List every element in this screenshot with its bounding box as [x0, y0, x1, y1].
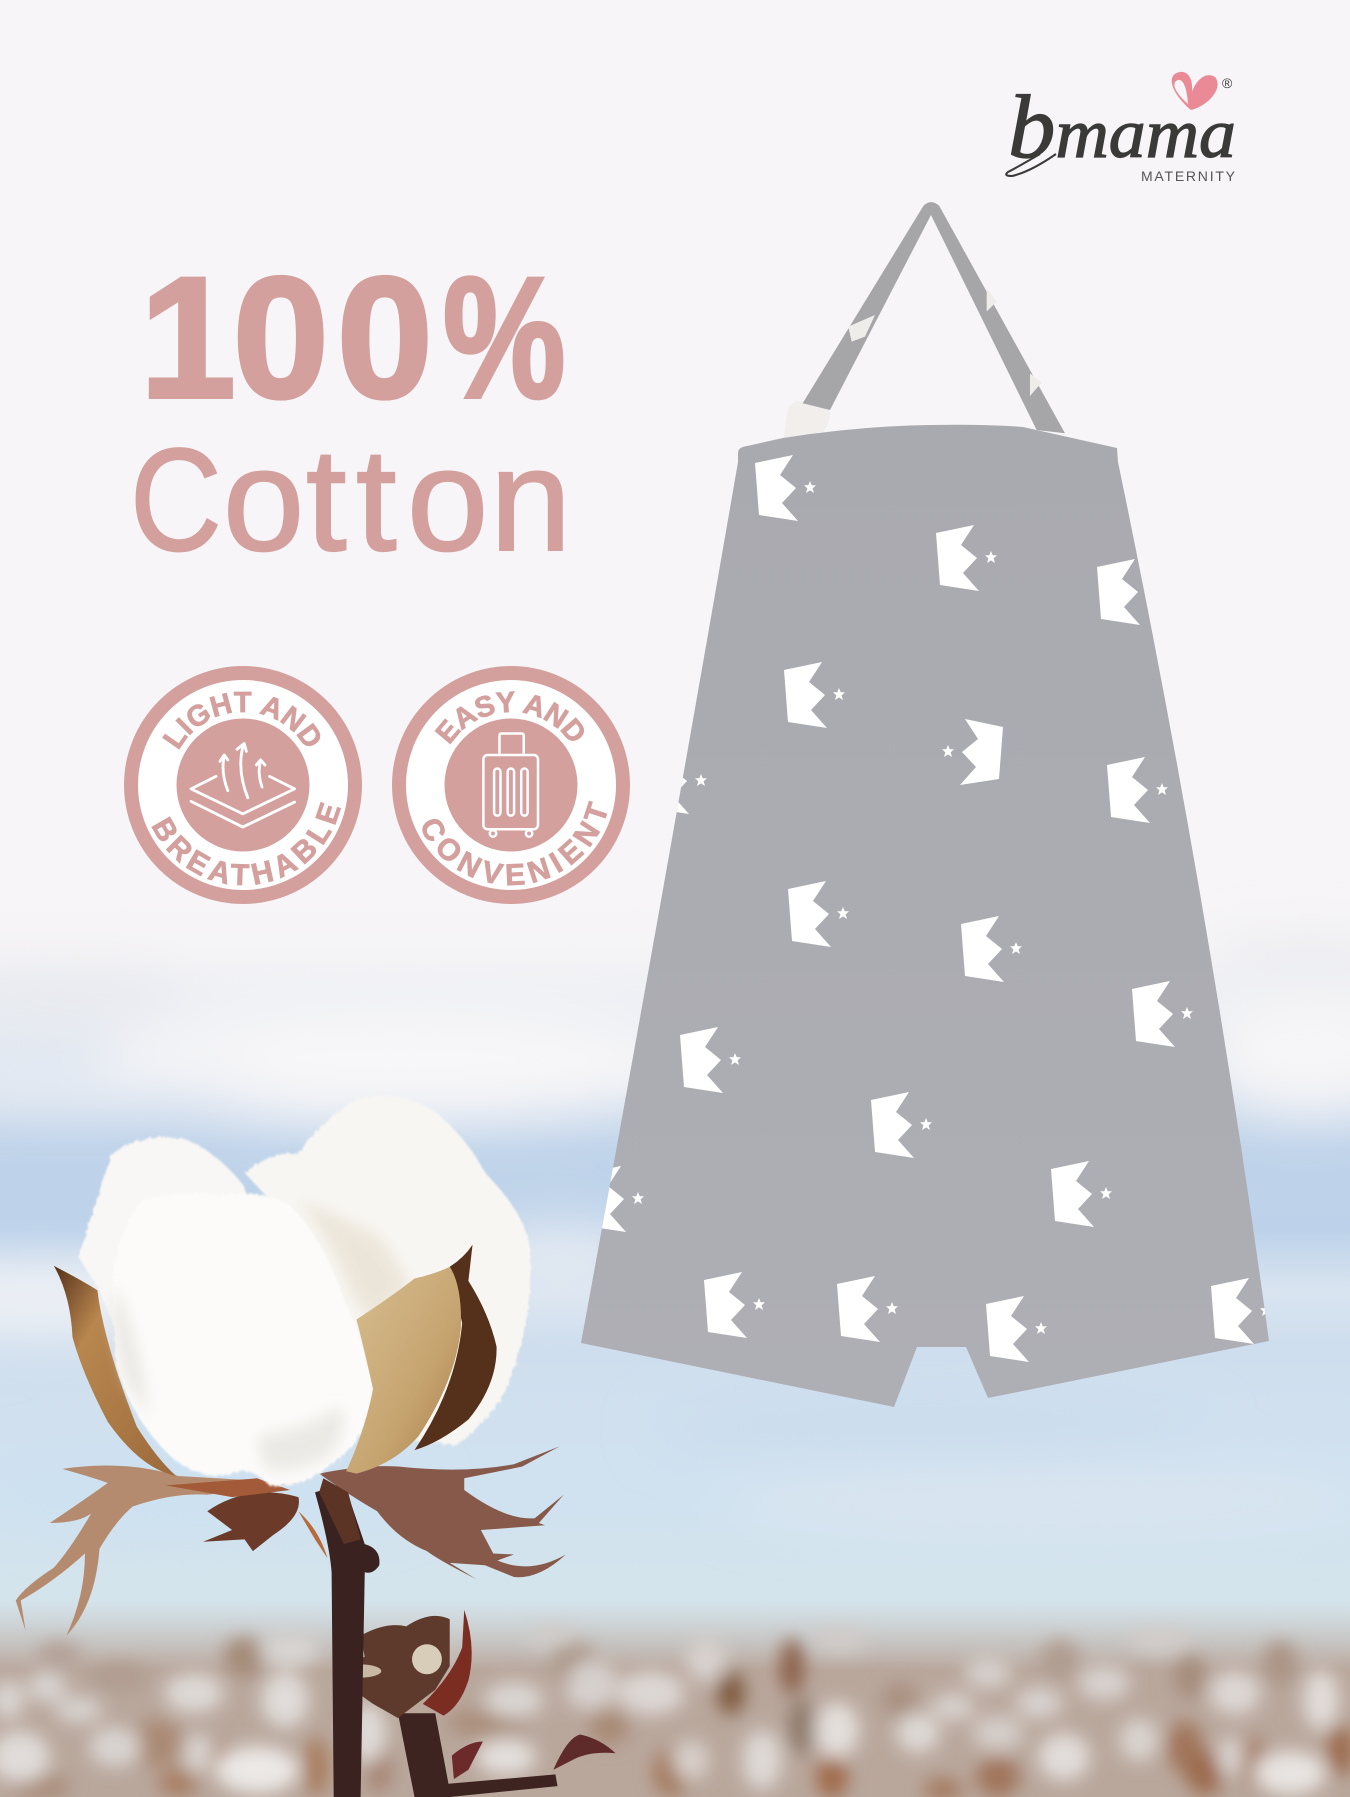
cotton field background	[0, 1600, 1350, 1797]
badge: easy and convenient: EASY AND	[434, 691, 584, 744]
sepals	[16, 1446, 566, 1636]
icon: suitcase	[483, 734, 538, 837]
cotton boll: front lobe	[112, 1193, 373, 1486]
badge: easy and convenient	[392, 666, 630, 904]
logo: bmama maternity: ®	[1222, 75, 1233, 91]
stem	[315, 1483, 379, 1797]
logo: bmama maternity: MATERNITY	[1141, 168, 1236, 184]
badge: light and breathable: LIGHT AND	[162, 692, 320, 750]
logo heart	[1172, 72, 1218, 110]
heading: 100%: 100	[140, 242, 433, 434]
icon: layers with rising air	[191, 744, 295, 827]
inner husk	[414, 1245, 497, 1450]
clouds	[0, 944, 1350, 1530]
back lobe shading	[298, 1201, 410, 1323]
heading: 100%	[140, 242, 565, 435]
nursing cover: crown and star pattern	[583, 455, 1272, 1362]
heading: Cotton: otton	[223, 418, 571, 581]
cotton plant	[16, 1096, 616, 1797]
heading: 100%: %	[443, 242, 565, 435]
right petal	[346, 1267, 461, 1474]
nursing cover: fabric panel	[581, 425, 1269, 1407]
front lobe shading	[112, 1286, 344, 1470]
logo: bmama maternity: bmama	[1008, 78, 1236, 177]
nursing cover: neck strap	[783, 202, 1065, 440]
badge: light and breathable: BREATHABLE	[151, 802, 342, 886]
heading: Cotton: C	[130, 418, 222, 581]
cotton boll: back lobe	[245, 1096, 530, 1445]
badge: light and breathable	[124, 666, 362, 904]
left petal	[54, 1266, 176, 1476]
cotton boll: left back lobe	[79, 1137, 265, 1351]
badge: easy and convenient: CONVENIENT	[422, 800, 608, 886]
lower bud and branch	[338, 1610, 616, 1797]
